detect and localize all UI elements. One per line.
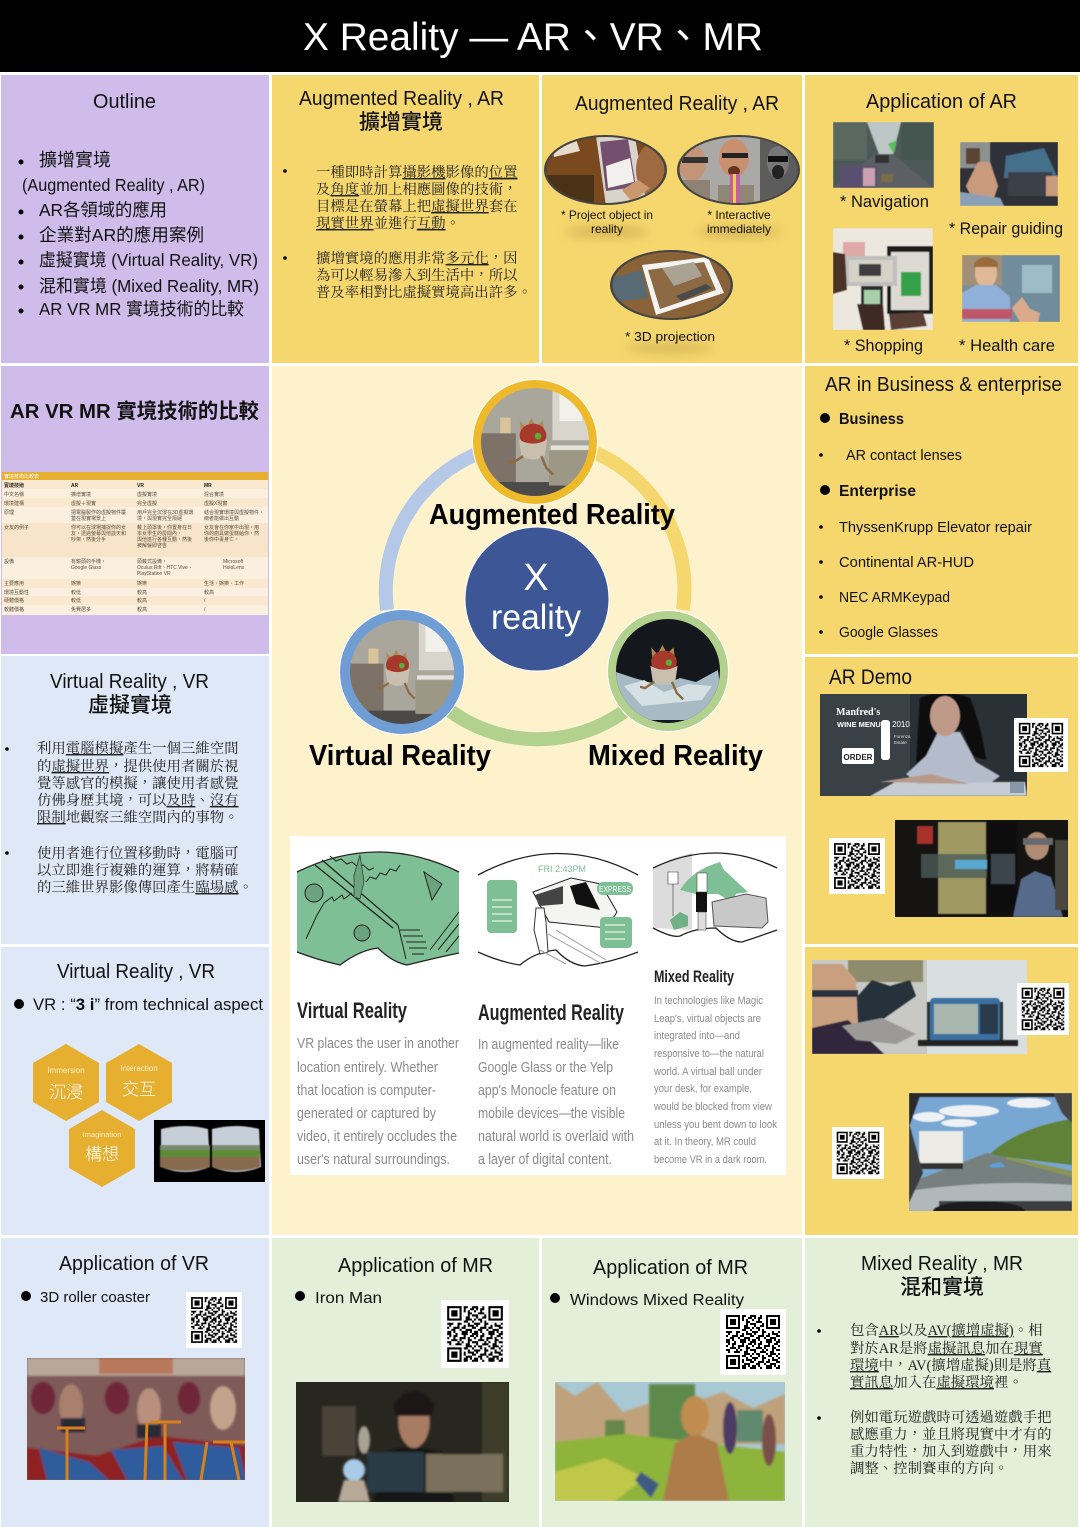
definition text: 環境中，AV(擴增虛擬)則是將真: [850, 1356, 1052, 1374]
comparison table: PlayStation VR: [137, 571, 171, 577]
definition text: 現實世界並進行互動。: [316, 215, 460, 232]
definition text: 為可以輕易滲入到生活中，所以: [316, 266, 518, 284]
column: virtual reality text: user's natural surroundings.: [297, 1151, 450, 1168]
comparison table: 後你中毒身亡。: [204, 536, 239, 543]
goggle: augmented reality: EXPRESS: [599, 885, 631, 894]
comparison table: AR: [71, 483, 79, 489]
center circle: x reality: X: [523, 557, 549, 599]
node: mixed reality: [607, 610, 729, 732]
hexagon: interaction: [106, 1044, 172, 1121]
heading chinese: 混和實境: [900, 1271, 984, 1301]
qr code: [1017, 983, 1069, 1035]
comparison table: 中文名稱: [4, 491, 24, 498]
column: virtual reality text: generated or captured by: [297, 1105, 436, 1122]
column: mixed reality text: Leap's, virtual objects are: [654, 1013, 761, 1025]
comparison table: 硬體價格: [4, 597, 24, 604]
heading: AR in Business & enterprise: [825, 373, 1062, 396]
comparison table: 主要應用: [4, 580, 24, 587]
definition text: 一種即時計算攝影機影像的位置: [316, 163, 518, 181]
label: mixed reality: Mixed Reality: [588, 740, 763, 772]
comparison table: Oculus Rift、HTC Vive、: [137, 565, 193, 571]
comparison table: Microsoft: [223, 559, 244, 565]
caption: interactive: [697, 208, 781, 238]
panel: application of MR iron man: [272, 1238, 539, 1527]
definition text: [817, 1321, 1052, 1477]
column: augmented reality text: a layer of digital content.: [478, 1151, 612, 1168]
comparison table: 較低: [71, 589, 81, 596]
label: virtual reality: Virtual Reality: [309, 740, 491, 772]
comparison table: 娛樂: [137, 580, 147, 587]
comparison table: 虛擬＋現實: [71, 500, 96, 507]
comparison table: 你可以在球場捕捉你的女: [71, 524, 126, 531]
enterprise list: Google Glasses: [839, 625, 938, 641]
comparison table: 設備: [4, 558, 14, 565]
column: mixed reality text: [653, 967, 777, 1166]
comparison table: 你的廚具做蛋糕給你，然: [204, 530, 259, 537]
definition text: 仿佛身歷其境，可以及時、沒有: [37, 792, 239, 809]
comparison table: 被解僱即啓告: [137, 542, 167, 549]
oval photo: 3d projection: [610, 250, 734, 320]
comparison table: 女友的例子: [4, 524, 29, 531]
column: augmented reality text: natural world is overlaid with: [478, 1128, 634, 1145]
photo: wine menu demo: Forenza: [894, 734, 911, 739]
definition text: 的三維世界影像傳回產生臨場感。: [37, 878, 253, 896]
bullet: iron man: Iron Man: [315, 1290, 382, 1307]
business list: Business: [839, 411, 904, 428]
caption: navigation: * Navigation: [840, 193, 929, 211]
photo: wine menu demo: [820, 694, 1027, 796]
column: mixed reality text: world. A virtual ball under: [653, 1066, 762, 1078]
comparison table: 虛擬X現實: [204, 500, 227, 507]
comparison table: 娛樂: [71, 580, 81, 587]
comparison table: 與他進行各種互動，然後: [137, 536, 192, 543]
comparison table: 女友會在你家中出現，用: [204, 524, 259, 531]
comparison table: 用戶完全沉浸在3D虛擬環: [137, 509, 193, 516]
outline list: 混和實境 (Mixed Reality, MR): [39, 276, 259, 296]
enterprise list: NEC ARMKeypad: [839, 590, 950, 606]
outline list: 擴增實境: [39, 146, 111, 172]
heading: Application of MR: [593, 1256, 748, 1279]
business list: [819, 411, 962, 464]
bullet: windows mixed reality: Windows Mixed Reality: [570, 1292, 744, 1309]
caption: repair guiding: * Repair guiding: [949, 220, 1063, 238]
enterprise list: Enterprise: [839, 483, 916, 500]
qr code: [720, 1309, 786, 1375]
photo: vr stereo view: [154, 1120, 265, 1182]
heading: Mixed Reality , MR: [861, 1252, 1023, 1275]
caption: project object: [561, 208, 653, 238]
column: augmented reality text: Google Glass or the Yelp: [478, 1059, 613, 1076]
column: virtual reality text: Virtual Reality: [297, 998, 408, 1023]
photo: wine menu demo: Estate: [894, 740, 907, 745]
comparison table: 實境技術比較表: [4, 473, 39, 480]
business list: AR contact lenses: [846, 448, 962, 464]
hexagon: interaction: 交互: [122, 1075, 156, 1100]
comparison table: 環境建構: [4, 500, 24, 507]
column: virtual reality text: [297, 998, 459, 1168]
title: X Reality — AR、VR、MR: [303, 16, 763, 59]
oval photo: project object: [544, 132, 668, 206]
heading: AR Demo: [829, 666, 912, 689]
caption: interactive: * Interactive: [707, 208, 771, 222]
3i bullet: VR : “3 i” from technical aspect: [33, 996, 263, 1014]
heading: AR VR MR 實境技術的比較: [10, 399, 259, 423]
definition text: 包含AR以及AV(擴增虛擬)。相: [850, 1321, 1042, 1339]
hexagon: immersion: 沉浸: [49, 1078, 83, 1103]
comparison table: 生活、娛樂、工作: [204, 580, 244, 587]
comparison table: 結合現實環境與虛擬物件，: [204, 509, 264, 516]
heading: Augmented Reality , AR: [299, 87, 504, 110]
qr code: [1014, 718, 1068, 772]
photo: wine menu demo: Manfred's: [836, 707, 880, 718]
column: virtual reality text: location entirely. Whether: [297, 1059, 438, 1076]
heading: Augmented Reality , AR: [575, 92, 779, 115]
comparison table: 有鏡頭的手機，: [71, 558, 106, 565]
comparison table: MR: [204, 483, 212, 489]
bullet: roller coaster: 3D roller coaster: [40, 1290, 150, 1306]
comparison table: 環境互動性: [4, 589, 29, 596]
oval photo: interactive: [677, 135, 801, 205]
column: mixed reality text: become VR in a dark room.: [654, 1154, 767, 1166]
goggle: augmented reality: [478, 854, 638, 966]
definition text: 普及率相對比虛擬實境高出許多。: [316, 283, 532, 301]
enterprise list: ThyssenKrupp Elevator repair: [839, 520, 1032, 536]
photo: shopping: [833, 228, 933, 330]
definition text: 利用電腦模擬產生一個三維空間: [37, 739, 239, 757]
definition text: [283, 163, 532, 301]
column: virtual reality text: video, it entirely occludes the: [297, 1128, 457, 1145]
photo: wine menu demo: ORDER: [844, 753, 873, 762]
panel: AR demo continued: [805, 947, 1078, 1235]
comparison table: /: [204, 598, 206, 604]
column: augmented reality text: mobile devices—the visible: [478, 1105, 625, 1122]
definition text: 調整、控制賽車的方向。: [850, 1459, 1008, 1477]
column: mixed reality text: In technologies like Magic: [654, 995, 763, 1007]
comparison table: 混合實境: [204, 491, 224, 498]
column: mixed reality text: would be blocked from view: [653, 1101, 772, 1113]
label: augmented reality: Augmented Reality: [429, 499, 675, 531]
panel: application of AR: [805, 75, 1078, 363]
column: augmented reality text: app's Monocle feature on: [478, 1082, 616, 1099]
title: [0, 0, 1080, 72]
photo: iron man: [296, 1382, 509, 1502]
panel: augmented reality definition: [272, 75, 539, 363]
caption: shopping: * Shopping: [844, 337, 923, 355]
comparison table: 虛擬實境: [137, 491, 157, 498]
comparison table: [2, 472, 268, 615]
definition text: 實訊息加入在虛擬環境裡。: [850, 1373, 1023, 1391]
goggle: augmented reality: FRI 2:43PM: [538, 864, 586, 874]
comparison table: 較高: [137, 597, 147, 604]
comparison table: 原理: [4, 510, 14, 516]
outline list: 企業對AR的應用案例: [39, 225, 204, 245]
comparison table: 擴增實境: [71, 491, 91, 498]
column: mixed reality text: at it. In theory, MR could: [654, 1136, 756, 1148]
qr code: [829, 838, 885, 894]
hexagon: imagination: [69, 1110, 135, 1187]
column: mixed reality text: responsive to—the natural: [654, 1048, 764, 1060]
heading: Virtual Reality , VR: [57, 960, 215, 983]
panel: application of MR windows: [542, 1238, 802, 1527]
enterprise list: Continental AR-HUD: [839, 555, 974, 571]
comparison table: 本女學生的房間內，: [137, 530, 182, 537]
node: virtual reality: [339, 609, 465, 735]
photo: repair guiding: [960, 142, 1058, 206]
comparison table: HoloLens: [223, 565, 245, 571]
outline list: 虛擬實境 (Virtual Reality, VR): [39, 250, 258, 270]
comparison table: 友，透過螢幕與他談天和: [71, 530, 126, 537]
comparison table: VR: [137, 483, 144, 489]
comparison table: 戴上頭罩後，你置身在日: [137, 524, 192, 531]
comparison table: 較高: [137, 589, 147, 596]
column: mixed reality text: your desk, for example,: [654, 1083, 752, 1095]
definition text: 例如電玩遊戲時可透過遊戲手把: [850, 1409, 1051, 1426]
comparison table: 完全虛擬: [137, 500, 157, 507]
qr code: [186, 1292, 242, 1348]
caption: 3d projection: * 3D projection: [625, 329, 715, 344]
hexagon: imagination: Imagination: [83, 1130, 121, 1139]
column: mixed reality text: Mixed Reality: [654, 967, 734, 986]
definition text: 覺等感官的模擬，讓使用者感覺: [37, 774, 238, 792]
goggle: mixed reality: [653, 853, 777, 942]
panel: outline: [1, 75, 269, 363]
hexagon: immersion: [33, 1044, 99, 1121]
definition text: 使用者進行位置移動時，電腦可: [37, 844, 238, 862]
outline list: AR VR MR 實境技術的比較: [39, 299, 244, 319]
column: mixed reality text: unless you bent down to look: [654, 1119, 777, 1131]
column: augmented reality text: In augmented reality—like: [478, 1036, 619, 1053]
panel: augmented reality features: [542, 75, 802, 363]
definition text: 感應重力，並且將現實中才有的: [850, 1425, 1051, 1443]
heading: outline: Outline: [93, 90, 156, 113]
comparison table: 軟體價格: [4, 606, 24, 613]
photo: tablet demo: [812, 960, 1027, 1054]
heading: Virtual Reality , VR: [50, 670, 209, 693]
definition text: 及角度並加上相應圖像的技術，: [316, 180, 518, 198]
comparison table: 免費居多: [71, 606, 91, 613]
enterprise list: [819, 483, 1032, 641]
heading: Application of MR: [338, 1254, 493, 1277]
caption: project object: reality: [591, 222, 623, 236]
caption: interactive: immediately: [707, 222, 771, 236]
comparison table: 實境技術: [4, 482, 24, 489]
column: virtual reality text: VR places the user in another: [297, 1035, 459, 1052]
panel: application of VR: [1, 1238, 269, 1527]
definition text: 重力特性，加入到遊戲中，用來: [850, 1442, 1051, 1460]
caption: health care: * Health care: [959, 337, 1055, 355]
comparison table: 把電腦製作的虛擬物件覆: [71, 509, 126, 516]
comparison table: 較低: [71, 597, 81, 604]
panel: AR demo: [805, 657, 1078, 944]
column: mixed reality text: integrated into—and: [654, 1030, 740, 1042]
definition text: 目標是在螢幕上把虛擬世界套在: [316, 197, 518, 215]
photo: windows mixed reality: [555, 1382, 785, 1501]
panel: virtual reality 3i: [1, 947, 269, 1235]
heading chinese: 擴增實境: [359, 106, 443, 136]
comparison illustration: [290, 836, 786, 1175]
ring arcs: [386, 453, 684, 739]
photo: health care: [962, 255, 1060, 322]
outline list: (Augmented Reality , AR): [22, 175, 205, 195]
center circle: x reality: reality: [491, 598, 581, 637]
comparison table: 頭戴式設備，: [137, 558, 167, 565]
hexagon: imagination: 構想: [85, 1140, 119, 1165]
photo: hololens demo: [895, 820, 1068, 917]
comparison table: 較高: [137, 606, 147, 613]
qr code: [832, 1127, 884, 1179]
panel: mixed reality definition: [805, 1238, 1078, 1527]
outline list: AR各領域的應用: [39, 200, 167, 220]
comparison table: 境，與現實完全隔絕: [137, 515, 182, 522]
column: augmented reality text: Augmented Reality: [478, 1000, 625, 1025]
definition text: 對於AR是將虛擬訊息加在現實: [850, 1339, 1043, 1357]
heading: Application of AR: [866, 90, 1017, 113]
definition text: 限制地觀察三維空間內的事物。: [37, 808, 238, 826]
panel: AR in business and enterprise: [805, 366, 1078, 654]
hexagon: immersion: Immersion: [47, 1066, 85, 1075]
definition text: 以立即進行複雜的運算，將精確: [37, 861, 238, 879]
definition text: 的虛擬世界，提供使用者關於視: [37, 757, 239, 775]
goggle: virtual reality: [297, 852, 459, 965]
comparison table: 較高: [204, 589, 214, 596]
panel: x reality center: [272, 366, 802, 1235]
comparison table: 蓋在現實場景上: [71, 515, 106, 522]
photo: wine menu demo: WINE MENU: [837, 720, 881, 729]
column: virtual reality text: that location is computer-: [297, 1082, 436, 1099]
panel: technology comparison: [1, 366, 269, 654]
definition text: [5, 739, 253, 896]
hexagon: interaction: Interaction: [120, 1064, 158, 1073]
photo: wine menu demo: 2010: [892, 720, 910, 729]
node: augmented reality: [472, 379, 598, 505]
heading: Application of VR: [59, 1252, 209, 1275]
comparison table: Google Glass: [71, 565, 102, 571]
caption: 3d projection: [625, 329, 715, 353]
photo: roller coaster: [27, 1358, 245, 1480]
center circle: x reality: [465, 527, 609, 671]
panel: virtual reality definition: [1, 656, 269, 944]
definition text: 擴增實境的應用非常多元化，因: [316, 250, 518, 267]
heading chinese: 虛擬實境: [88, 689, 172, 719]
caption: project object: * Project object in: [561, 208, 653, 222]
photo: navigation: [833, 122, 934, 188]
photo: car hud demo: [909, 1093, 1072, 1211]
comparison table: 吵架，然後分手: [71, 536, 106, 543]
comparison table: 兩者能做出互動: [204, 515, 239, 522]
column: augmented reality text: [478, 1000, 634, 1168]
outline list: [18, 146, 259, 319]
qr code: [441, 1300, 509, 1368]
comparison table: /: [204, 607, 206, 613]
